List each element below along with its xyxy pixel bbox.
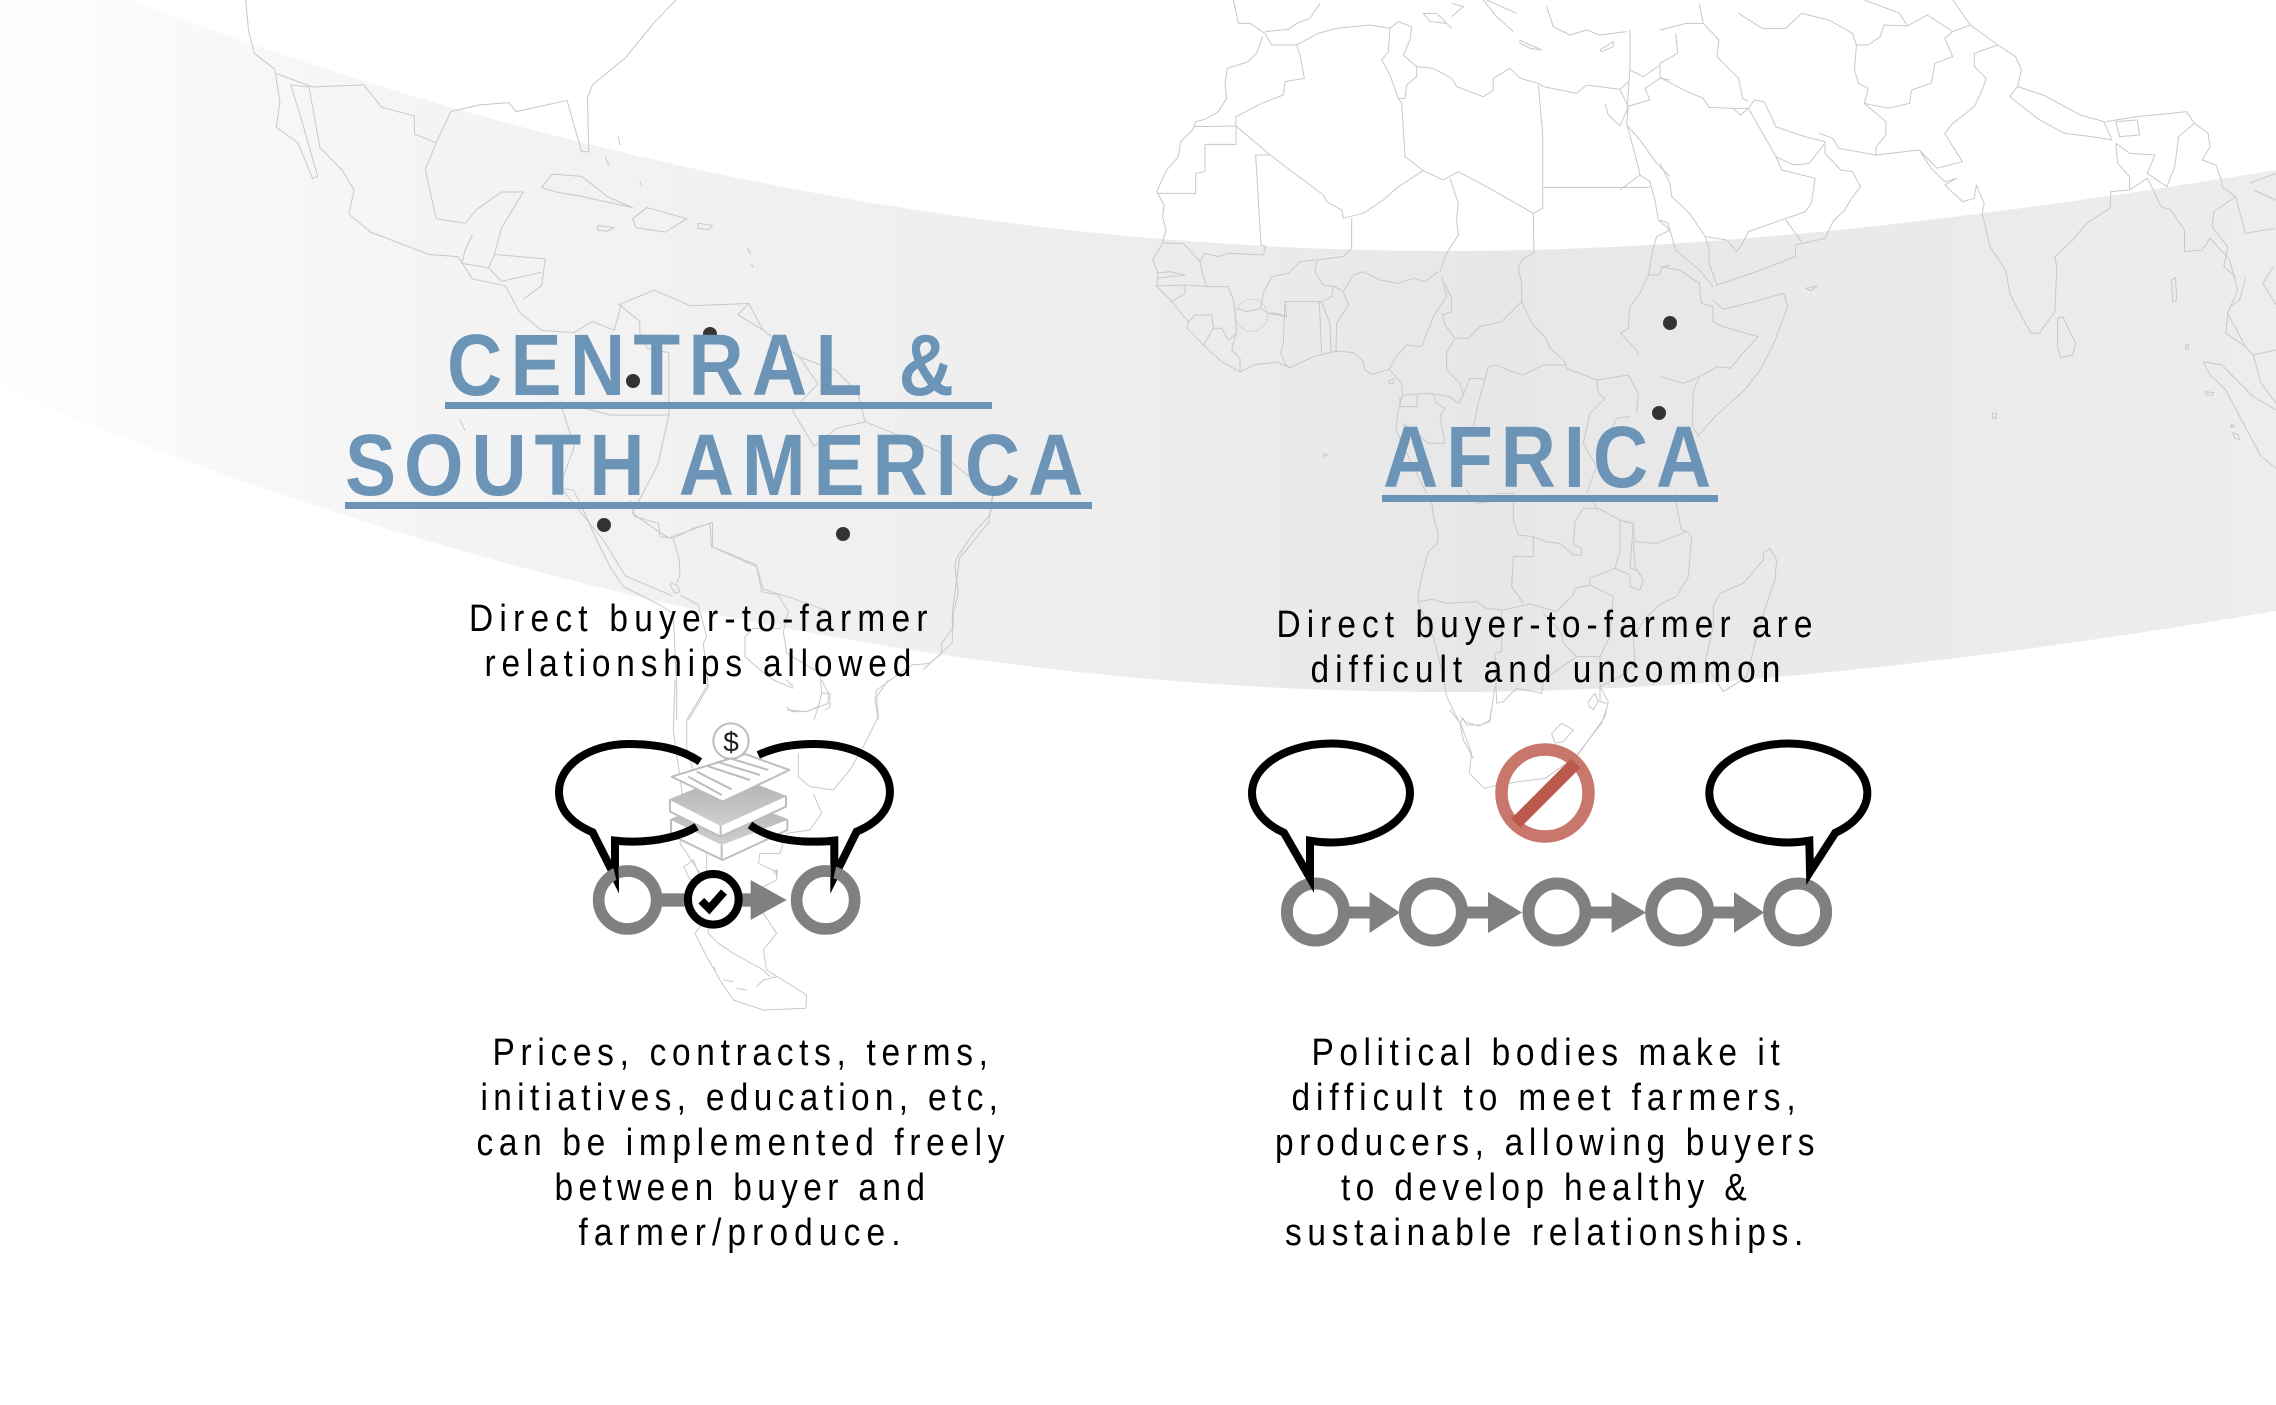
heading: Central and South America: SOUTH AMERICA — [345, 417, 1083, 514]
map: southern cone — [673, 680, 888, 1010]
text: barriers in Africa — [1275, 1031, 1814, 1253]
icon: value chain rings and arrow — [599, 871, 855, 929]
icon: contract documents and dollar — [670, 723, 789, 860]
icon: farmer speech bubble — [1709, 744, 1867, 872]
text: direct relationships difficult: difficult and uncommon — [1310, 648, 1780, 690]
text: direct relationships allowed: Direct buyer-to-farmer — [469, 597, 928, 639]
map: southern Africa tip — [1450, 710, 1606, 788]
text: direct relationships allowed — [469, 597, 928, 684]
text: benefits in Central and South America: initiatives, education, etc, — [480, 1076, 998, 1118]
map: southern Africa and Madagascar — [1418, 490, 1777, 758]
diagram: direct buyer to farmer with contract — [559, 723, 890, 929]
map: north and west Africa — [1153, 0, 1670, 493]
curved grey latitude band — [0, 0, 2276, 692]
icon: contract documents and dollar: $ — [723, 726, 739, 757]
text: benefits in Central and South America: between buyer and — [554, 1166, 925, 1208]
heading: Central and South America: CENTRAL & — [447, 317, 954, 414]
text: benefits in Central and South America: farmer/produce. — [578, 1211, 901, 1253]
icon: check mark badge — [688, 874, 739, 925]
map: South America centre — [560, 488, 993, 720]
origin location dots — [597, 316, 1677, 541]
icon: tails over rings — [612, 837, 838, 890]
map: middle east and south asia — [1660, 0, 2276, 468]
text: direct relationships difficult: Direct buyer-to-farmer are — [1276, 603, 1812, 645]
diagram: long chain of intermediaries — [1252, 744, 1867, 940]
text: benefits in Central and South America — [476, 1031, 1005, 1253]
icon: chain connectors and arrows — [1340, 892, 1764, 933]
text: barriers in Africa: difficult to meet farmers, — [1292, 1076, 1796, 1118]
text: barriers in Africa: Political bodies make it — [1312, 1031, 1780, 1073]
icon: buyer speech bubble — [1252, 744, 1410, 878]
text: barriers in Africa: producers, allowing buyers — [1275, 1121, 1814, 1163]
icon: left and right speech bubbles — [559, 744, 890, 877]
text: direct relationships difficult — [1276, 603, 1812, 690]
world map outline — [246, 0, 2276, 1010]
text: benefits in Central and South America: Prices, contracts, terms, — [492, 1031, 988, 1073]
text: barriers in Africa: sustainable relationships. — [1285, 1211, 1803, 1253]
text: direct relationships allowed: relationships allowed — [484, 642, 911, 684]
icon: prohibited sign — [1502, 750, 1588, 836]
heading: Africa: AFRICA — [1383, 409, 1711, 506]
heading: Central and South America — [345, 317, 1092, 514]
map: Central and South America north — [246, 0, 992, 670]
text: barriers in Africa: to develop healthy & — [1341, 1166, 1747, 1208]
text: benefits in Central and South America: can be implemented freely — [476, 1121, 1005, 1163]
icon: chain rings — [1287, 884, 1826, 940]
